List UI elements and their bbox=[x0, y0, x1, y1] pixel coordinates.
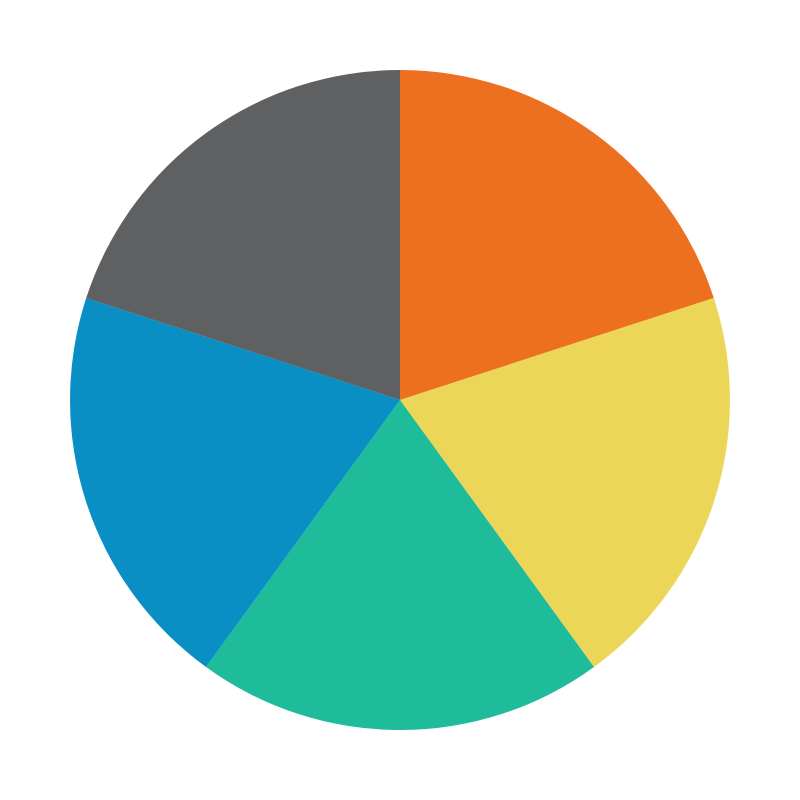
slice: yellow bbox=[400, 298, 730, 667]
slice: gray bbox=[86, 70, 400, 400]
slice: teal bbox=[206, 400, 594, 730]
slice: blue bbox=[70, 298, 400, 667]
slice: orange bbox=[400, 70, 714, 400]
